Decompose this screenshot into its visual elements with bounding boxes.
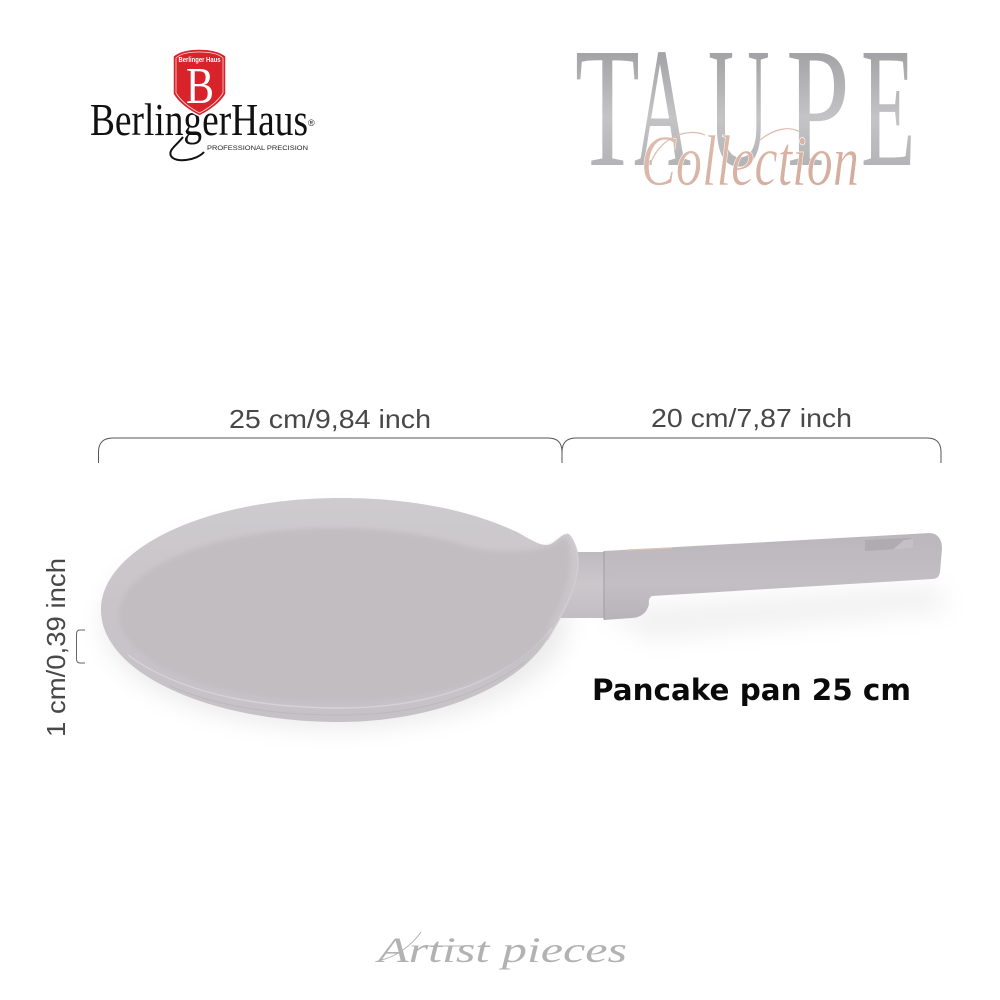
product name: Pancake pan 25 cm xyxy=(592,673,911,707)
icon: red shield xyxy=(173,49,226,116)
pan lip highlight xyxy=(128,628,552,708)
diameter bracket xyxy=(98,438,562,463)
dimension: pan height xyxy=(41,558,85,737)
signature text: Artist pieces xyxy=(375,930,627,970)
collection script: Collection xyxy=(641,121,859,201)
icon: red shield: B xyxy=(186,58,214,115)
handle joint line xyxy=(603,551,605,620)
collection title TAUPE: P xyxy=(786,13,850,203)
pan body xyxy=(101,498,578,722)
handle hang hole xyxy=(865,538,913,551)
collection title TAUPE: U xyxy=(708,14,770,203)
handle grip xyxy=(604,533,942,620)
collection title TAUPE: E xyxy=(861,14,915,203)
dimension: pan diameter xyxy=(98,404,562,463)
icon: red shield: Berlinger Haus xyxy=(178,57,221,64)
pan shadow xyxy=(103,516,950,728)
brand logo: Berlinger Haus xyxy=(90,49,315,160)
collection title TAUPE: T xyxy=(575,12,640,202)
collection title TAUPE: A xyxy=(634,12,691,202)
handle bracket xyxy=(562,438,941,463)
pan floor and spout surface xyxy=(119,528,570,702)
height label: 1 cm/0,39 inch xyxy=(41,558,71,737)
logo tagline: PROFESSIONAL PRECISION xyxy=(207,146,308,152)
signature flourish xyxy=(380,932,468,960)
dimension: handle length xyxy=(562,403,941,463)
logo wordmark: BerlingerHaus xyxy=(90,94,308,145)
registered mark: ® xyxy=(308,118,315,128)
diameter label: 25 cm/9,84 inch xyxy=(229,404,431,434)
collection title TAUPE xyxy=(575,12,915,203)
product: pancake pan xyxy=(101,498,950,728)
handle neck xyxy=(552,552,605,618)
rose gold accent xyxy=(627,548,672,550)
handle hole highlight xyxy=(893,539,913,550)
footer signature xyxy=(375,930,627,970)
height bracket xyxy=(76,630,85,663)
handle label: 20 cm/7,87 inch xyxy=(651,403,852,433)
script flourish xyxy=(650,129,800,165)
collection logo: Taupe Collection xyxy=(575,12,915,203)
pan lower groove xyxy=(170,662,525,715)
pan rim edge xyxy=(547,534,578,640)
wordmark g swoosh xyxy=(170,137,204,160)
